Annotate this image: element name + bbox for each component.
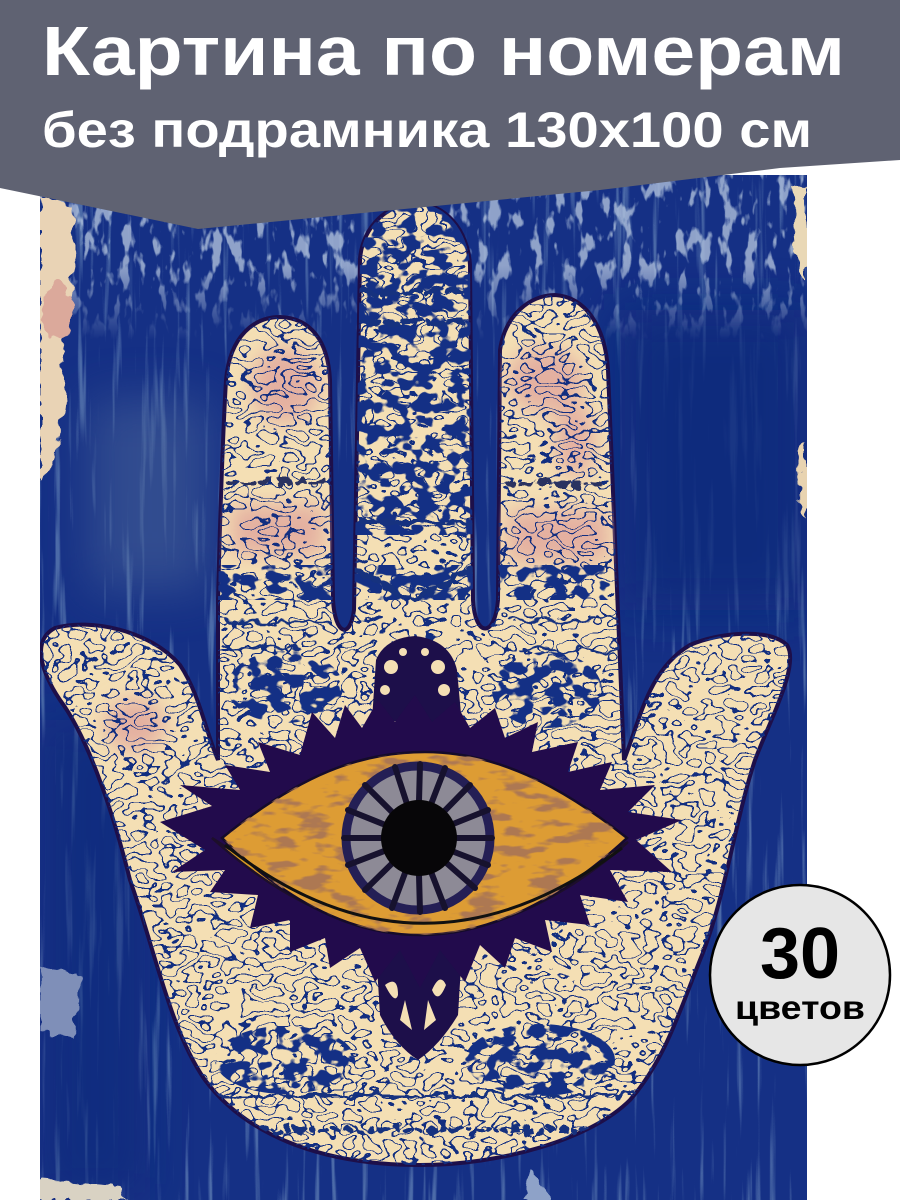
dense blue motifs — [215, 206, 618, 1096]
eye lashes — [160, 695, 682, 988]
hand ornament — [40, 200, 800, 1170]
eyelid lower rim — [211, 837, 629, 914]
subtitle: без подрамника 130х100 см — [42, 102, 812, 158]
painting — [40, 175, 810, 1200]
blue vein pattern — [40, 200, 800, 1170]
hand silhouette — [41, 203, 790, 1165]
colour count badge — [710, 885, 890, 1065]
lid line — [225, 845, 622, 923]
hamsa hand — [40, 200, 800, 1170]
patterned bands — [200, 292, 640, 1130]
sclera mottling — [224, 754, 614, 935]
badge caption: цветов — [735, 989, 865, 1026]
iris rays — [344, 764, 492, 912]
evil eye — [160, 695, 682, 988]
cream worn edges — [40, 185, 807, 1200]
header banner — [0, 0, 900, 229]
title: Картина по номерам — [42, 12, 845, 90]
painting background — [40, 175, 810, 1200]
iris — [344, 764, 492, 912]
upper dark ornament — [372, 636, 462, 725]
eye sclera — [222, 752, 627, 935]
badge number: 30 — [760, 914, 840, 994]
lower dark ornament — [376, 950, 462, 1060]
pupil — [381, 800, 457, 876]
pink patches — [105, 347, 608, 751]
